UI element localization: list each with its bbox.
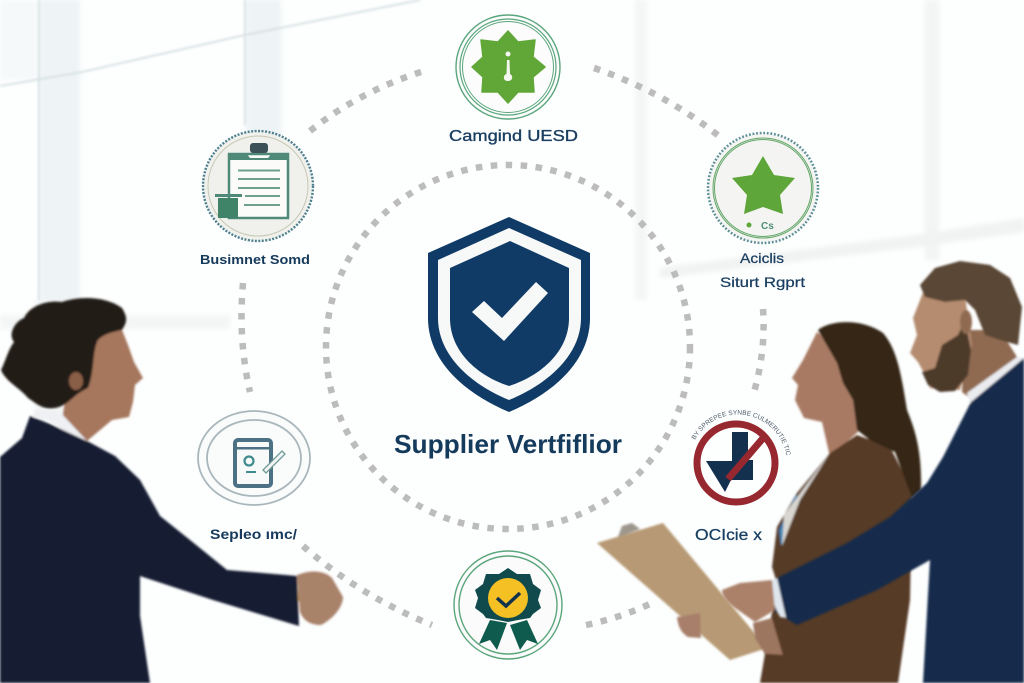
woman's bracelet bbox=[298, 575, 304, 601]
label: star node bbox=[720, 250, 805, 290]
icon: green seal with info mark bbox=[472, 31, 545, 103]
node: star badge bbox=[708, 133, 818, 243]
man's neck bbox=[962, 330, 1017, 402]
outer dashed ring segments bbox=[242, 68, 764, 625]
woman's lower hand bbox=[677, 613, 701, 638]
woman's clasped hand bbox=[297, 571, 343, 625]
man's navy suit bbox=[772, 358, 1024, 683]
person: left woman shaking hands bbox=[0, 298, 343, 683]
curved microtext: BY SPREPEE SYNBE CULMERUTIE TIC bbox=[691, 410, 790, 456]
person: right woman in brown jacket bbox=[677, 322, 921, 683]
node: clipboard badge bbox=[203, 131, 313, 241]
woman's face bbox=[792, 332, 858, 457]
man's ear bbox=[960, 310, 972, 334]
label: star node: Aciclis bbox=[740, 250, 784, 266]
woman's navy jacket bbox=[0, 416, 299, 683]
node: signed document badge bbox=[198, 411, 310, 505]
icon: green star bbox=[732, 156, 795, 214]
label: clipboard node: Busimnet Somd bbox=[200, 252, 310, 267]
clipboard clip bbox=[618, 523, 640, 537]
man's hand bbox=[722, 580, 775, 622]
label: prohibition node: OCIcie x bbox=[695, 527, 762, 544]
node: prohibition badge bbox=[691, 410, 790, 506]
central shield icon bbox=[428, 217, 590, 412]
woman's hair bbox=[1, 298, 126, 408]
node: ribbon badge bbox=[454, 551, 562, 659]
woman's lapel edge bbox=[782, 453, 830, 546]
man's shirt collar bbox=[967, 357, 1024, 410]
inner dashed ring bbox=[326, 165, 690, 529]
second lower hand bbox=[753, 618, 783, 655]
woman's long hair bbox=[818, 322, 921, 498]
label: document node: Sepleo ımc/ bbox=[210, 526, 297, 542]
woman's brown jacket bbox=[760, 435, 912, 683]
man's face bbox=[910, 290, 972, 390]
icon: clipboard bbox=[215, 143, 288, 218]
woman's face and neck bbox=[62, 325, 143, 441]
woman's collar bbox=[33, 410, 87, 445]
man's beard bbox=[922, 320, 971, 392]
clipboard held by pair bbox=[597, 523, 767, 660]
man's hair bbox=[920, 261, 1022, 345]
man's shirt cuff bbox=[772, 578, 786, 618]
central title: Supplier Vertfiflior bbox=[394, 429, 622, 459]
icon: document and pen bbox=[235, 440, 285, 486]
woman's blue blouse bbox=[779, 495, 800, 546]
woman's ear bbox=[69, 372, 83, 390]
node: top green badge bbox=[456, 15, 560, 119]
label: top node: Camgind UESD bbox=[449, 128, 578, 145]
label: star node: Siturt Rgprt bbox=[720, 274, 805, 290]
icon: award ribbon bbox=[475, 568, 541, 650]
icon: small mark: Cs bbox=[761, 221, 774, 232]
icon: navy check behind prohibition ring bbox=[706, 432, 753, 492]
person: right man in navy suit bbox=[722, 261, 1024, 683]
